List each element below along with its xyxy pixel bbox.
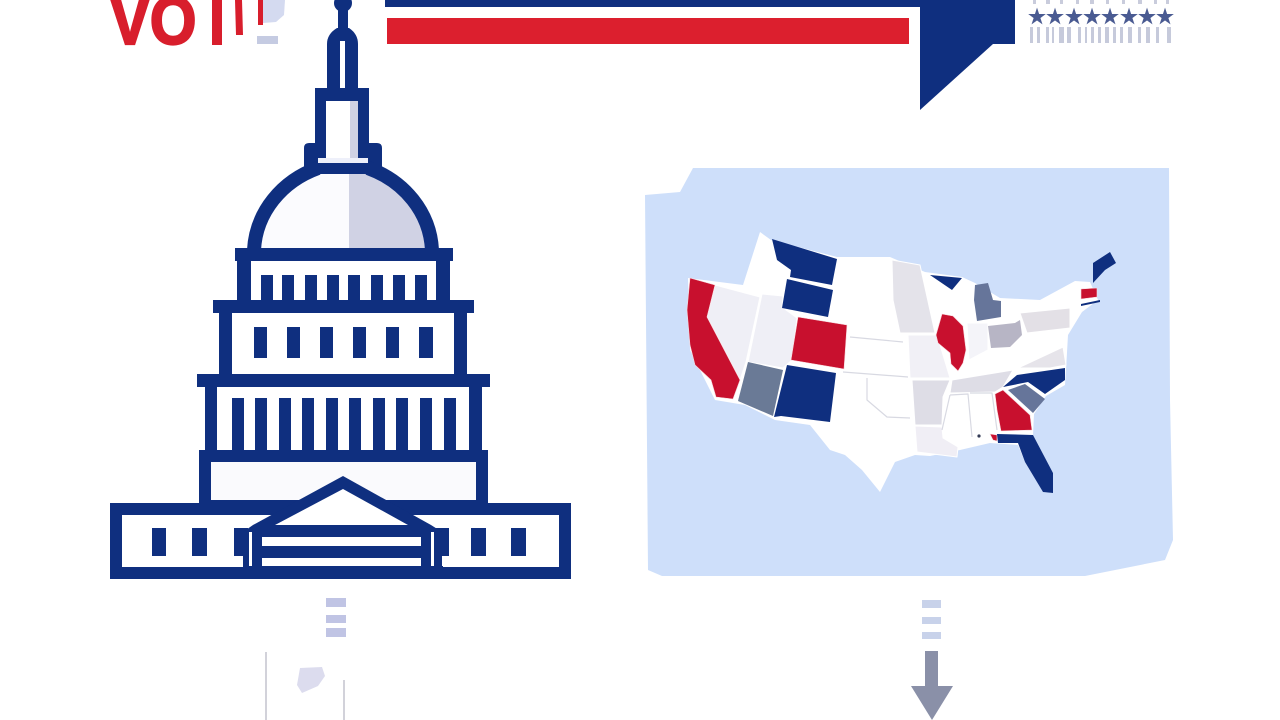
base block: [205, 456, 482, 506]
upper colonnade: [235, 248, 453, 301]
connector: dashes under capitol: [326, 598, 346, 637]
red states: [687, 278, 1097, 441]
icon: faint ballot box fragment: [265, 652, 345, 720]
star row with ticks: ★: [1083, 6, 1101, 28]
icon: capitol building: [116, 0, 565, 574]
arrow: down: [911, 651, 953, 720]
middle storey with windows: [213, 300, 474, 375]
star row with ticks: ★: [1028, 6, 1046, 28]
capitol dome and lantern: [254, 0, 433, 250]
star row with ticks: ★: [1046, 6, 1064, 28]
header banner with navy flag: [385, 0, 1015, 110]
red bar: [387, 18, 909, 44]
central portico and pediment: [243, 476, 443, 574]
star row with ticks: ★: [1120, 6, 1138, 28]
star row with ticks: ★: [1065, 6, 1083, 28]
chart: US state map: [687, 232, 1116, 493]
star row with ticks: ★: [1156, 6, 1174, 28]
star row with ticks: [1028, 0, 1174, 43]
wings with windows: [116, 509, 565, 573]
slate states: [738, 283, 1045, 416]
lower colonnade: [197, 374, 490, 451]
neutral states: [707, 260, 1070, 457]
land silhouette: [688, 232, 1098, 493]
heading: vote text fragment: [110, 0, 285, 59]
connector: dashes under map: [922, 600, 941, 639]
panel: map background: [645, 168, 1173, 576]
star row with ticks: ★: [1101, 6, 1119, 28]
navy states: [772, 239, 1116, 493]
navy top bar: [385, 0, 925, 7]
navy ribbon pointer: [920, 0, 1015, 110]
state borders: [843, 337, 997, 437]
star row with ticks: ★: [1138, 6, 1156, 28]
